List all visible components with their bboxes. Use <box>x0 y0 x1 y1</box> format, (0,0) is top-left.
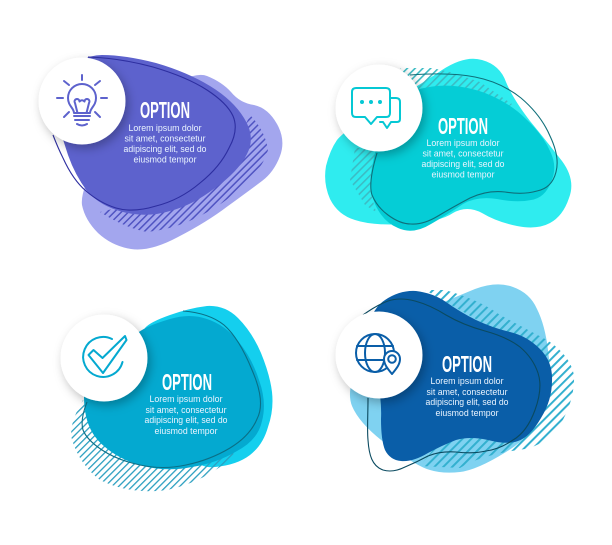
panel: option 3 cyan blob <box>60 306 272 491</box>
text block: option 1: Lorem ipsum dolor <box>128 123 202 134</box>
text block: option 4: eiusmod tempor <box>436 408 498 419</box>
panel: option 4 blue blob <box>336 284 574 473</box>
panel: option 2 turquoise blob <box>325 59 571 231</box>
heading: option 3: OPTION <box>162 369 212 395</box>
heading: option 1: OPTION <box>140 97 190 123</box>
icon badge: check mark <box>60 314 148 402</box>
text block: option 3: sit amet, consectetur <box>146 405 226 416</box>
text block: option 1: adipiscing elit, sed do <box>124 144 206 155</box>
text block: option 4 <box>426 376 508 419</box>
heading: option 4: OPTION <box>442 351 492 377</box>
text block: option 4: adipiscing elit, sed do <box>426 397 508 408</box>
panel: option 1 purple blob <box>38 55 282 250</box>
icon badge: chat bubbles <box>336 64 422 152</box>
text block: option 2: eiusmod tempor <box>432 170 494 180</box>
text block: option 2: sit amet, consectetur <box>422 148 504 160</box>
text block: option 2 <box>422 138 504 180</box>
text block: option 2: Lorem ipsum dolor <box>426 138 500 149</box>
text block: option 3: Lorem ipsum dolor <box>150 394 222 405</box>
text block: option 3 <box>144 394 228 437</box>
text block: option 4: Lorem ipsum dolor <box>430 376 504 387</box>
text block: option 2: adipiscing elit, sed do <box>422 159 504 170</box>
heading: option 2: OPTION <box>438 113 488 139</box>
text block: option 3: adipiscing elit, sed do <box>144 415 228 426</box>
icon badge: globe with pin <box>336 312 422 398</box>
text block: option 4: sit amet, consectetur <box>426 387 508 398</box>
text block: option 3: eiusmod tempor <box>154 426 218 437</box>
text block: option 1: sit amet, consectetur <box>124 134 206 144</box>
icon badge: light bulb <box>38 58 126 144</box>
text block: option 1: eiusmod tempor <box>134 154 196 166</box>
text block: option 1 <box>124 123 206 166</box>
